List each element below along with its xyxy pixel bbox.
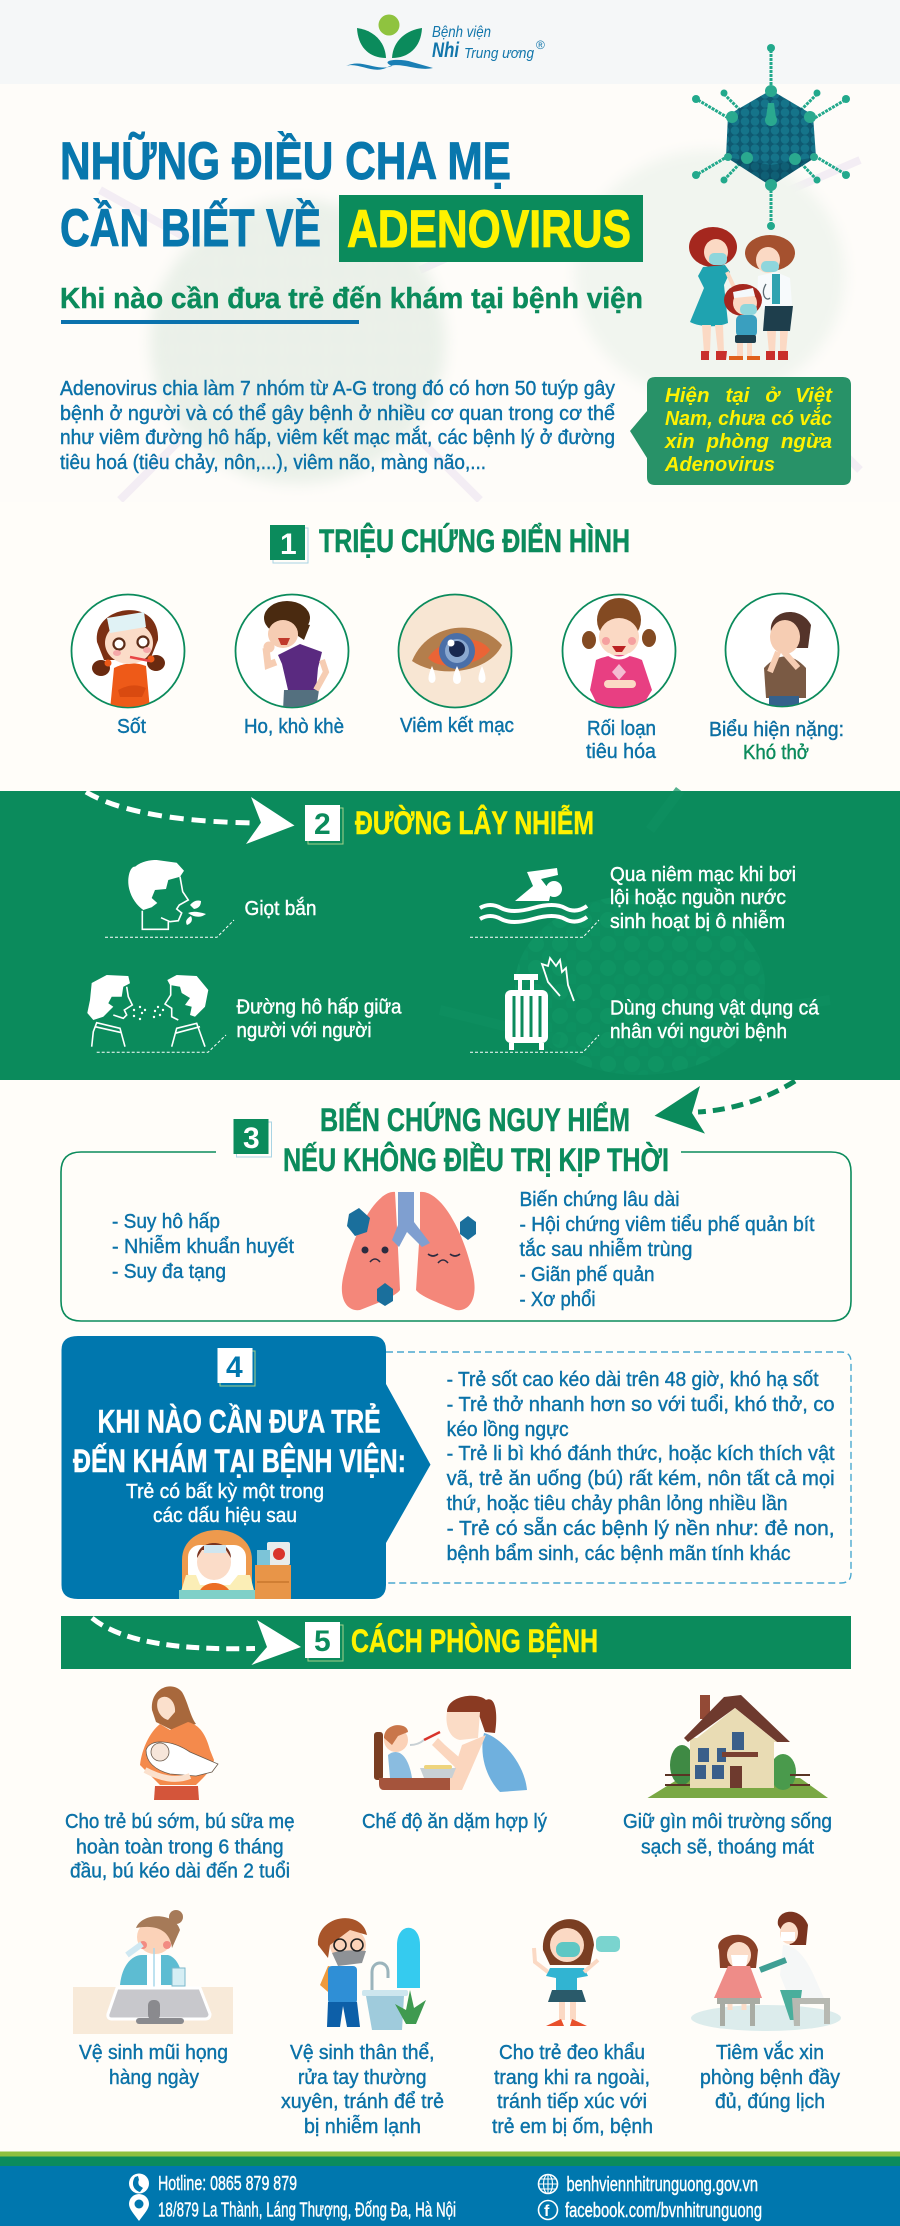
illustration: child vaccination <box>691 1912 841 2031</box>
tip: living environment <box>623 1695 832 1858</box>
facebook: facebook.com/bvnhitrunguong <box>565 2200 762 2222</box>
illustration: house <box>648 1695 828 1798</box>
logo: Bệnh viện <box>432 24 491 41</box>
sick child <box>724 284 762 360</box>
list: acute complications: - Suy đa tạng <box>112 1261 226 1283</box>
tip: wearing a mask: trẻ em bị ốm, bệnh <box>492 2116 653 2138</box>
facebook <box>538 2200 762 2222</box>
symptom: conjunctivitis: Viêm kết mạc <box>400 715 514 737</box>
tip: weaning diet: Chế độ ăn dặm hợp lý <box>362 1811 547 1833</box>
list: acute complications <box>112 1211 294 1283</box>
facebook: f <box>544 2203 550 2220</box>
logo: ® <box>536 38 545 52</box>
footer <box>0 2152 900 2226</box>
list: long-term complications: tắc sau nhiễm trùng <box>520 1238 692 1261</box>
section 3: complications <box>61 1081 851 1321</box>
tip: breastfeeding <box>65 1686 294 1882</box>
list: long-term complications: - Giãn phế quản <box>520 1264 654 1286</box>
callout: no vaccine: Adenovirus <box>664 454 775 476</box>
route: shared items: nhân với người bệnh <box>610 1021 787 1043</box>
list: warning signs: kéo lồng ngực <box>447 1419 569 1441</box>
adenovirus highlight: ADENOVIRUS <box>347 200 631 259</box>
list: warning signs: vã, trẻ ăn uống (bú) rất kém, nôn tất cả mọi <box>447 1468 835 1490</box>
callout: no vaccine <box>630 377 851 485</box>
heading 1: TRIỆU CHỨNG ĐIỂN HÌNH <box>319 523 630 559</box>
tip: vaccination <box>691 1912 841 2113</box>
list: warning signs: - Trẻ thở nhanh hơn so với tuổi, khó thở, co <box>447 1394 835 1416</box>
tip: nose and throat hygiene: Vệ sinh mũi họng <box>79 2042 228 2064</box>
address <box>129 2194 456 2222</box>
tip: breastfeeding: đầu, bú kéo dài đến 2 tuổi <box>70 1860 290 1882</box>
heading 3: BIẾN CHỨNG NGUY HIỂM <box>320 1102 630 1138</box>
arrow <box>86 792 294 844</box>
heading 2: ĐƯỜNG LÂY NHIỄM <box>355 805 594 841</box>
icon: virus <box>692 44 850 230</box>
section 1: symptoms <box>72 523 844 764</box>
list: long-term complications: - Xơ phổi <box>520 1289 596 1311</box>
tip: breastfeeding: Cho trẻ bú sớm, bú sữa mẹ <box>65 1811 294 1833</box>
route: swimming water: sinh hoạt bị ô nhiễm <box>610 910 785 933</box>
address: 18/879 La Thành, Láng Thượng, Đống Đa, Hà Nội <box>158 2200 456 2222</box>
heading 1: 1 <box>280 528 297 561</box>
route: droplets <box>105 860 316 937</box>
illustration: boy washing hands <box>318 1918 426 2030</box>
header band <box>0 0 900 84</box>
list: warning signs <box>447 1369 835 1565</box>
faint virus background <box>100 150 860 500</box>
heading band <box>61 1616 851 1669</box>
panel outline <box>61 1152 851 1321</box>
tip: weaning diet <box>362 1696 547 1833</box>
symptom: breathing difficulty <box>709 594 844 764</box>
heading 3 <box>234 1102 669 1178</box>
list: long-term complications: Biến chứng lâu dài <box>520 1189 680 1211</box>
logo <box>346 14 545 70</box>
callout: no vaccine: Nam, chưa có vắc <box>665 407 832 430</box>
tip: nose and throat hygiene: hàng ngày <box>109 2067 199 2089</box>
symptom: fever <box>72 594 184 738</box>
heading 1 <box>270 523 630 563</box>
section 2: transmission band <box>0 790 900 1080</box>
symptom: breathing difficulty: Khó thở <box>743 742 809 764</box>
illustration: lungs <box>342 1192 476 1310</box>
tip: body hygiene: Vệ sinh thân thể, <box>290 2042 434 2064</box>
tip: body hygiene: bị nhiễm lạnh <box>304 2115 421 2138</box>
symptom: fever: Sốt <box>117 716 146 738</box>
hero panel <box>60 44 862 502</box>
heading 4: KHI NÀO CẦN ĐƯA TRẺ <box>98 1404 381 1440</box>
illustration: mother feeding child <box>374 1696 527 1792</box>
illustration: mother nursing <box>140 1686 218 1800</box>
mother <box>689 227 738 360</box>
tip: wearing a mask: Cho trẻ đeo khẩu <box>499 2042 645 2064</box>
intro paragraph: bệnh ở người và có thể gây bệnh ở nhiều cơ quan trong cơ thể <box>60 403 615 425</box>
route: swimming water: lội hoặc nguồn nước <box>610 887 786 909</box>
tip: vaccination: phòng bệnh đầy <box>700 2067 840 2089</box>
logo: Trung ương <box>464 45 535 62</box>
symptom: cough <box>236 594 348 738</box>
route: breathing between people: Đường hô hấp giữa <box>236 996 402 1018</box>
tip: wearing a mask: tránh tiếp xúc với <box>497 2091 647 2113</box>
heading 3: NẾU KHÔNG ĐIỀU TRỊ KỊP THỜI <box>283 1142 669 1178</box>
tip: breastfeeding: hoàn toàn trong 6 tháng <box>76 1836 284 1858</box>
callout: no vaccine: xin phòng ngừa <box>664 431 832 453</box>
intro paragraph <box>60 378 615 474</box>
title: CẦN BIẾT VỀ <box>60 198 321 258</box>
heading 4 <box>73 1348 406 1479</box>
symptom: conjunctivitis <box>398 594 514 737</box>
illustration: nasal rinse <box>73 1910 233 2034</box>
doctor <box>745 235 795 360</box>
callout: no vaccine: Hiện tại ở Việt <box>665 385 833 407</box>
heading band: CÁCH PHÒNG BỆNH <box>351 1623 598 1659</box>
list: warning signs: thứ, hoặc tiêu chảy phân lỏng nhiều lần <box>447 1493 788 1515</box>
illustration: girl with mask <box>534 1919 620 2026</box>
symptom: digestive disorder: Rối loạn <box>587 718 656 740</box>
route: shared items: Dùng chung vật dụng cá <box>610 998 820 1020</box>
heading 4: 4 <box>226 1351 243 1384</box>
illustration: mother, child and doctor <box>689 227 795 360</box>
list: warning signs: - Trẻ li bì khó đánh thức, hoặc kích thích vật <box>447 1443 835 1465</box>
tip: living environment: Giữ gìn môi trường sống <box>623 1811 832 1833</box>
subheading: Trẻ có bất kỳ một trong <box>126 1481 324 1503</box>
tip: vaccination: Tiêm vắc xin <box>716 2041 824 2064</box>
tip: vaccination: đủ, đúng lịch <box>715 2091 825 2113</box>
heading 2 <box>305 805 594 844</box>
route: shared items <box>470 958 820 1052</box>
route: swimming water <box>470 864 796 937</box>
tip: wearing a mask: trang khi ra ngoài, <box>494 2067 650 2089</box>
tip: body hygiene: rửa tay thường <box>298 2067 426 2089</box>
subtitle: Khi nào cần đưa trẻ đến khám tại bệnh viện <box>60 283 643 315</box>
list: warning signs: bệnh bẩm sinh, các bệnh mãn tính khác <box>447 1543 791 1565</box>
tip: nose and throat hygiene <box>73 1910 233 2089</box>
intro paragraph: Adenovirus chia làm 7 nhóm từ A-G trong đó có hơn 50 tuýp gây <box>60 378 615 400</box>
intro paragraph: như viêm đường hô hấp, viêm kết mạc mắt, các bệnh lý ở đường <box>60 426 615 449</box>
list: warning signs: - Trẻ có sẵn các bệnh lý nền như: đẻ non, <box>447 1517 835 1540</box>
heading 4: ĐẾN KHÁM TẠI BỆNH VIỆN: <box>73 1443 406 1479</box>
heading 3: 3 <box>243 1122 260 1155</box>
route: droplets: Giọt bắn <box>244 897 316 920</box>
symptom: cough: Ho, khò khè <box>244 716 344 738</box>
hotline: Hotline: 0865 879 879 <box>158 2173 297 2195</box>
list: long-term complications: - Hội chứng viêm tiểu phế quản bít <box>520 1214 815 1236</box>
route: breathing between people <box>87 975 402 1052</box>
arrow <box>654 1081 795 1134</box>
symptom: breathing difficulty: Biểu hiện nặng: <box>709 719 844 741</box>
route: swimming water: Qua niêm mạc khi bơi <box>610 864 796 886</box>
blue arrow panel <box>62 1336 430 1599</box>
list: warning signs: - Trẻ sốt cao kéo dài trên 48 giờ, khó hạ sốt <box>447 1369 819 1391</box>
tip: body hygiene: xuyên, tránh để trẻ <box>281 2091 444 2113</box>
list: acute complications: - Suy hô hấp <box>112 1211 220 1233</box>
intro paragraph: tiêu hoá (tiêu chảy, nôn,...), viêm não, màng não,... <box>60 452 486 474</box>
tip: wearing a mask <box>492 1919 653 2138</box>
list: acute complications: - Nhiễm khuẩn huyết <box>112 1235 294 1258</box>
website <box>538 2174 758 2196</box>
logo: Nhi <box>432 39 460 62</box>
symptom: digestive disorder: tiêu hóa <box>586 741 657 763</box>
dashed panel <box>386 1352 851 1583</box>
list: long-term complications <box>520 1189 815 1311</box>
title: NHỮNG ĐIỀU CHA MẸ <box>60 131 511 191</box>
tip: body hygiene <box>281 1918 444 2138</box>
title <box>60 131 643 262</box>
heading band: 5 <box>314 1625 331 1658</box>
section 4: when to go to hospital <box>62 1336 851 1599</box>
heading 2: 2 <box>314 808 331 841</box>
hotline <box>129 2173 297 2195</box>
route: breathing between people: người với người <box>236 1020 372 1042</box>
tip: living environment: sạch sẽ, thoáng mát <box>641 1836 814 1858</box>
website: benhviennhitrunguong.gov.vn <box>566 2174 758 2196</box>
symptom: digestive disorder <box>562 594 676 763</box>
section 5: prevention <box>61 1616 851 2138</box>
illustration: sick child in bed <box>179 1530 291 1599</box>
subheading: các dấu hiệu sau <box>153 1505 297 1527</box>
subheading <box>126 1481 324 1527</box>
